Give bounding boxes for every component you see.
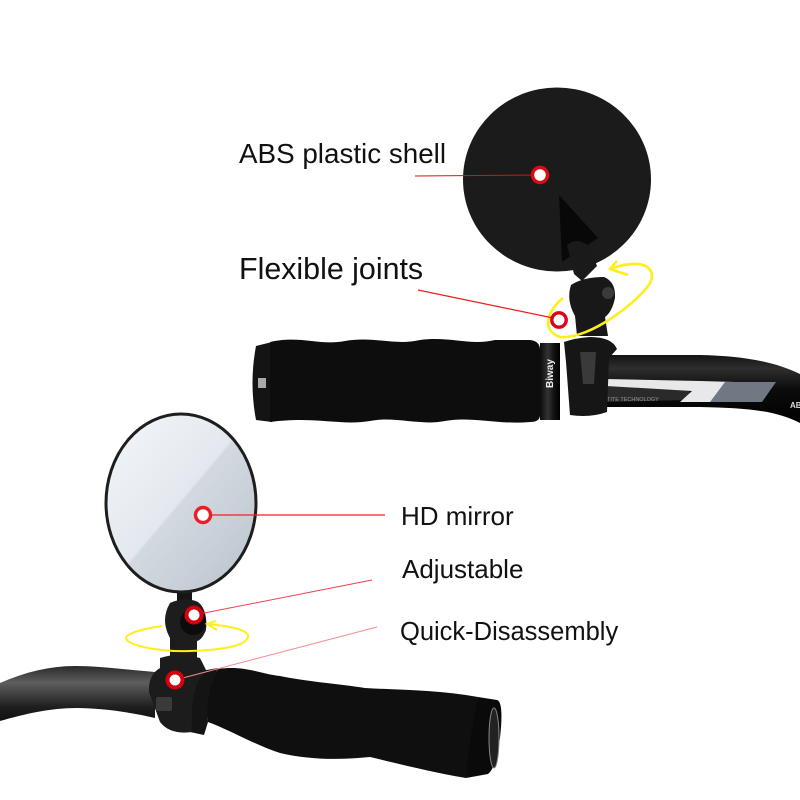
label: Adjustable: Adjustable (402, 554, 523, 584)
label: ABS plastic shell: ABS plastic shell (239, 138, 446, 169)
marker: Adjustable (186, 608, 202, 622)
bottom joint (165, 590, 206, 658)
metal collar with brand (540, 343, 560, 420)
handlebar tube (0, 666, 155, 721)
metal collar with brand: Biway (545, 359, 556, 388)
leader line: Flexible joints (418, 290, 558, 319)
foam grip (207, 668, 478, 778)
top yellow rotation arrow (548, 261, 652, 337)
marker: ABS plastic shell (532, 168, 548, 182)
leader line: HD mirror (203, 514, 385, 516)
top handlebar assembly (252, 337, 800, 423)
handlebar graphic: TITE TECHNOLOGY (607, 397, 659, 403)
label: Quick-Disassembly: Quick-Disassembly (400, 618, 618, 646)
marker: HD mirror (196, 508, 210, 522)
marker: Quick-Disassembly (168, 672, 182, 688)
bottom handlebar assembly (0, 655, 501, 778)
bar clamp (564, 337, 617, 416)
top mirror back shell (463, 88, 651, 272)
bottom mirror (106, 414, 256, 592)
leader line: Adjustable (194, 580, 372, 615)
top flexible joint (567, 241, 615, 336)
foam grip (270, 339, 540, 423)
left bar end collar (252, 342, 272, 422)
label: Flexible joints: Flexible joints (239, 252, 423, 286)
leader line: Quick-Disassembly (175, 627, 377, 680)
bottom yellow rotation arrow (126, 621, 248, 651)
marker: Flexible joints (552, 313, 566, 327)
handlebar graphic (606, 379, 800, 410)
right bar end collar (466, 697, 501, 778)
leader line: ABS plastic shell (415, 175, 540, 176)
metal collar (189, 668, 218, 735)
handlebar tube (595, 355, 800, 423)
label: HD mirror: HD mirror (401, 501, 514, 531)
bar clamp (149, 655, 207, 733)
